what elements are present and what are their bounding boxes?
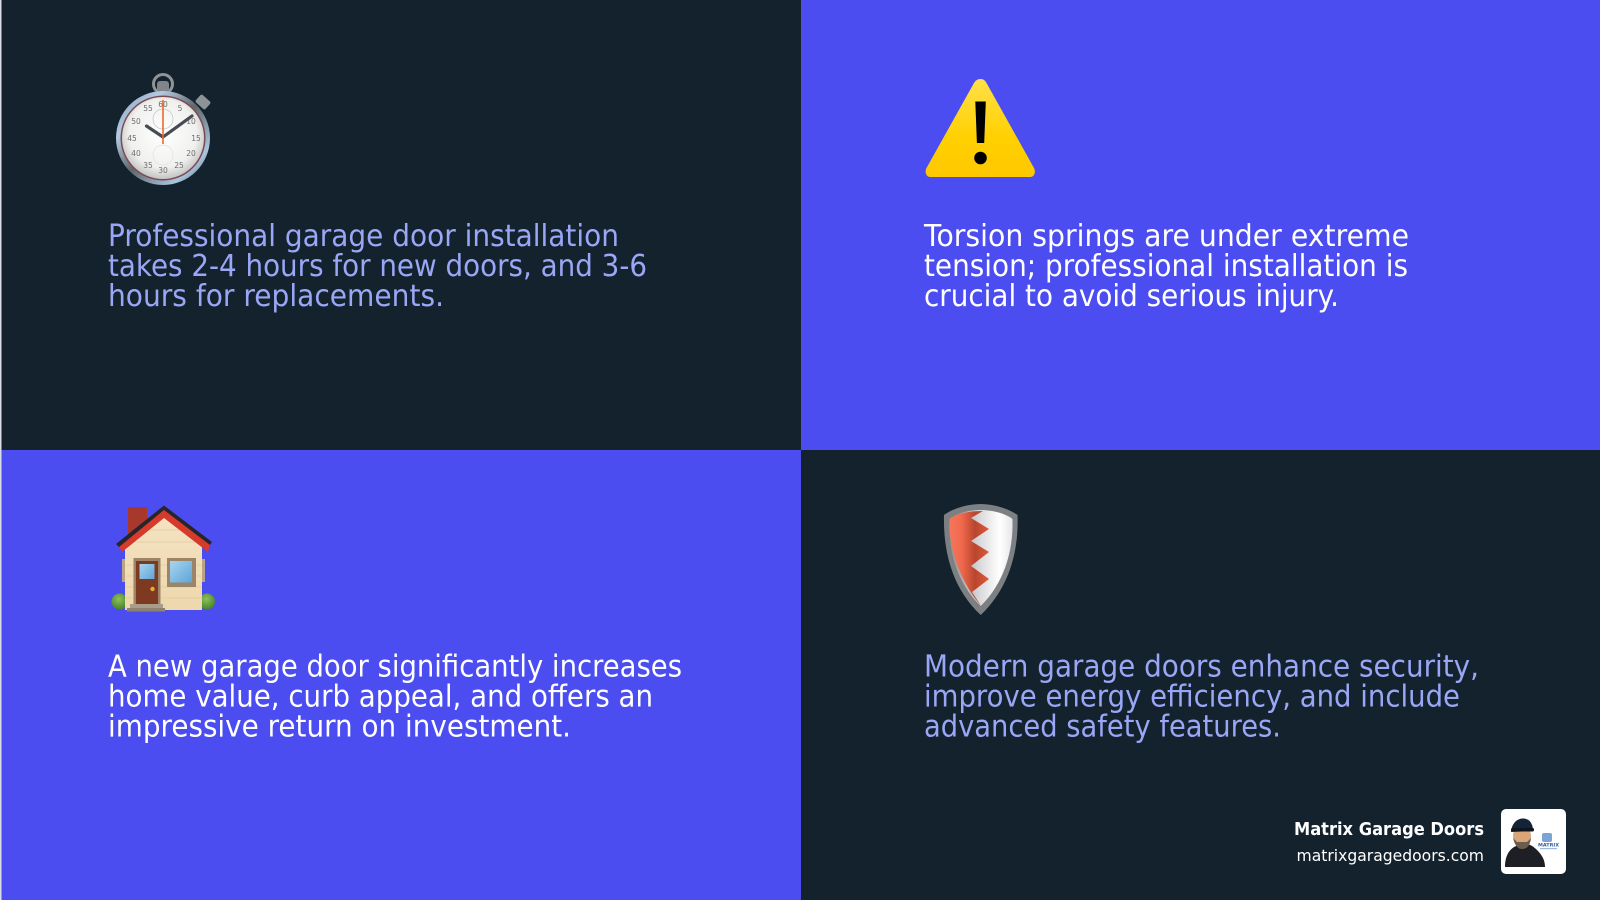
- panel: safety warning: [801, 0, 1600, 450]
- icon: stopwatch: 45: [127, 134, 137, 143]
- icon: stopwatch: 20: [186, 149, 196, 158]
- text: security: improve energy efficiency, and include: [924, 680, 1460, 714]
- icon: stopwatch: 50: [131, 117, 141, 126]
- icon: stopwatch: 40: [131, 149, 141, 158]
- icon: stopwatch: 25: [174, 161, 184, 170]
- panel: installation time: [0, 0, 801, 450]
- icon: stopwatch: 5: [178, 104, 183, 113]
- icon: warning triangle: [926, 79, 1035, 177]
- text: home value: A new garage door significantly increases: [108, 650, 682, 684]
- brand avatar card: [1501, 809, 1566, 874]
- text: installation time: hours for replacements.: [108, 279, 444, 314]
- text: security: Modern garage doors enhance security,: [924, 650, 1479, 684]
- panel: security: [801, 450, 1600, 900]
- brand avatar card: MATRIX: [1538, 842, 1560, 848]
- icon: stopwatch: [116, 74, 211, 185]
- icon: house: [112, 506, 215, 612]
- text: torsion springs: tension; professional installation is: [924, 249, 1408, 284]
- icon: stopwatch: 55: [143, 104, 153, 113]
- icon: stopwatch: 15: [191, 134, 201, 143]
- text: home value: impressive return on investment.: [108, 710, 571, 744]
- text: installation time: takes 2-4 hours for new doors, and 3-6: [108, 249, 647, 284]
- text: installation time: Professional garage door installation: [108, 219, 619, 254]
- icon: shield: [944, 504, 1018, 615]
- brand name: Matrix Garage Doors: [1294, 819, 1484, 840]
- icon: stopwatch: 35: [143, 161, 153, 170]
- panel: home value: [0, 450, 801, 900]
- text: torsion springs: Torsion springs are under extreme: [923, 219, 1409, 254]
- icon: stopwatch: 10: [186, 117, 196, 126]
- icon: stopwatch: 30: [158, 166, 168, 175]
- text: security: advanced safety features.: [924, 710, 1281, 744]
- text: home value: home value, curb appeal, and offers an: [108, 680, 653, 714]
- left edge strip: [0, 0, 2, 900]
- text: torsion springs: crucial to avoid serious injury.: [924, 279, 1339, 314]
- icon: stopwatch: 60: [158, 100, 168, 109]
- brand url: matrixgaragedoors.com: [1296, 846, 1484, 865]
